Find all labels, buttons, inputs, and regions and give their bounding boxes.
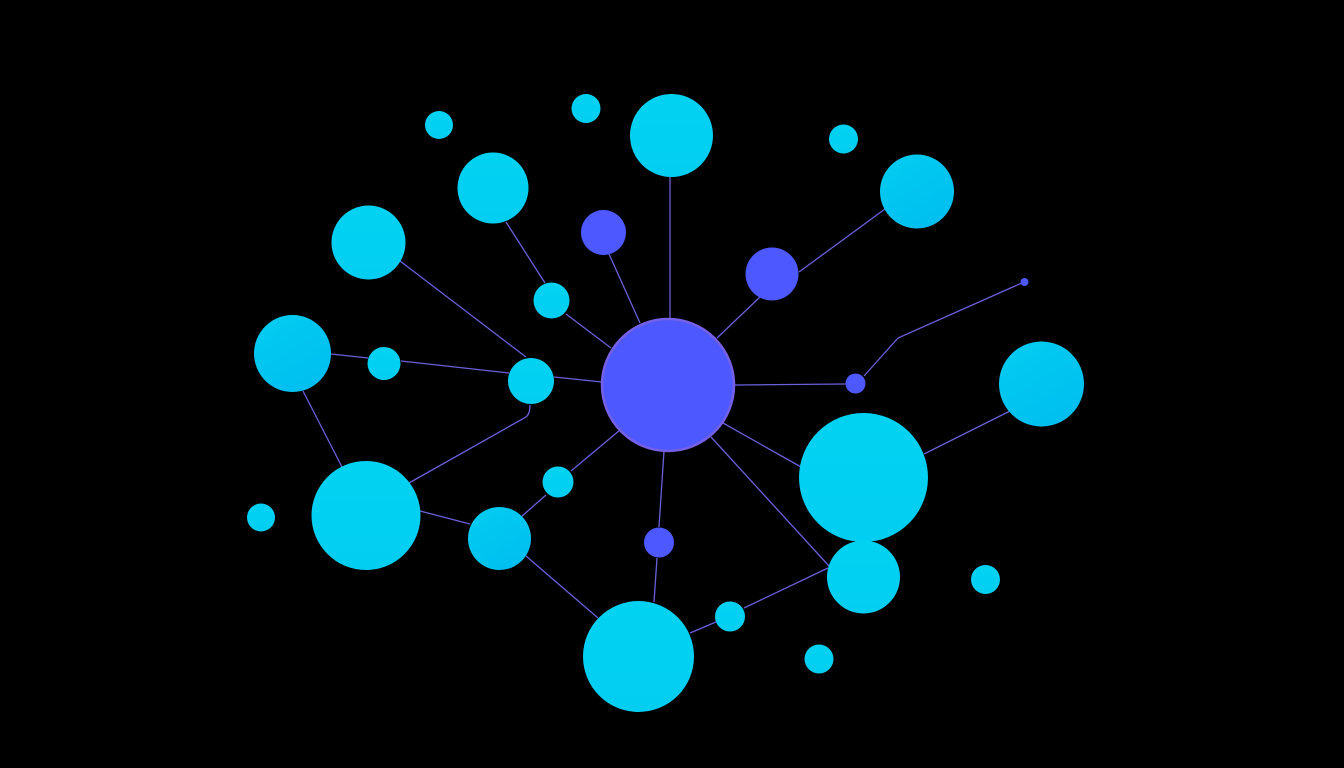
central hub node <box>602 319 734 451</box>
connecting lines <box>303 177 1024 633</box>
indigo nodes <box>581 210 1028 558</box>
cyan nodes <box>247 94 1084 712</box>
